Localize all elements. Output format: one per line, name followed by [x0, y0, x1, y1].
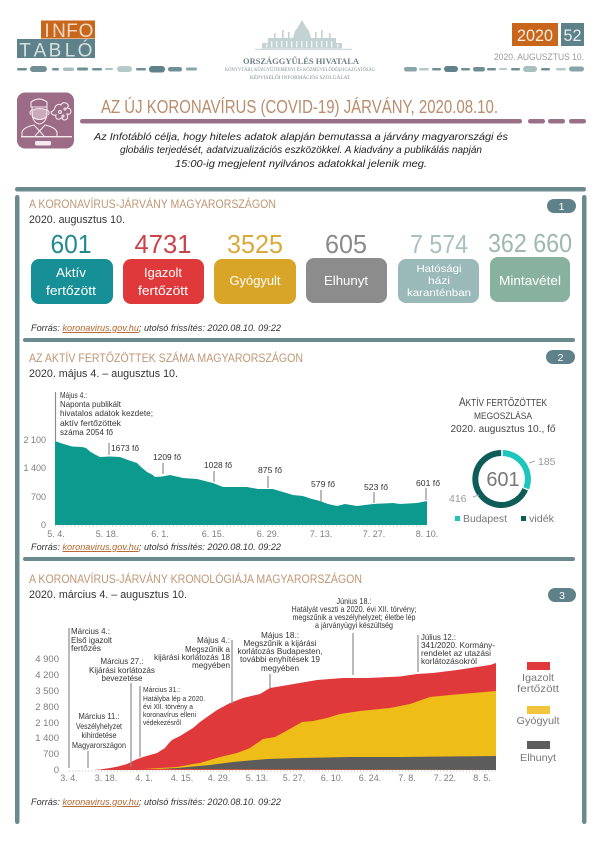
stat: recovered: Gyógyult: [230, 274, 281, 288]
area: recovered: [143, 691, 496, 770]
annotation: March 31: Hatályba lép a 2020.: [143, 694, 205, 703]
y axis labels: 0: [41, 520, 46, 530]
stat: confirmed: [123, 229, 204, 304]
intro text: globális terjedését, adatvizualizációs eszközökkel. A kiadvány a publikálás napján: [120, 144, 482, 156]
x axis labels: 6. 29.: [257, 529, 279, 539]
x axis labels: 6. 24.: [359, 773, 381, 783]
x axis labels: 5. 4.: [47, 529, 65, 539]
donut legend: [455, 513, 555, 525]
badge 3: 3: [559, 590, 565, 602]
panel frame: [15, 187, 586, 824]
annotation: June 18: megszűnik a veszélyhelyzet; életbe lép: [292, 612, 416, 622]
annotation: May 18: megyében: [261, 663, 299, 673]
annotation: July 12: korlátozásokról: [421, 656, 477, 666]
icon: doctor with mask and virus: [17, 92, 74, 148]
donut chart title: [450, 395, 556, 435]
donut chart title: 2020. augusztus 10., fő: [450, 423, 556, 435]
annotation: March 11: [72, 711, 126, 768]
title underline: [80, 119, 586, 124]
x axis labels: 5. 18.: [96, 529, 118, 539]
x axis labels: 5. 13.: [246, 773, 268, 783]
data labels: 1028 fő: [204, 460, 232, 470]
annotation: March 11: Veszélyhelyzet: [76, 721, 123, 731]
annotation: May 4 restrictions: megyében: [192, 660, 230, 670]
annotation: June 18: Hatályát veszti a 2020. évi XII. törvény;: [292, 604, 416, 614]
issue number and date: 2020. AUGUSZTUS 10.: [494, 52, 584, 63]
chart legend: [516, 662, 560, 764]
x axis labels: 8. 10.: [416, 529, 438, 539]
annotation: March 31: évi XII. törvény a: [143, 702, 194, 711]
chart legend: Igazolt: [522, 672, 554, 684]
section 1 date: 2020. augusztus 10.: [29, 214, 125, 226]
title: AZ ÚJ KORONAVÍRUS (COVID-19) JÁRVÁNY, 2020.08.10.: [101, 96, 498, 117]
annotation: May 18: további enyhítések 19: [240, 654, 320, 664]
panel: Hungary summary: [29, 198, 576, 334]
intro text: [93, 131, 509, 170]
x axis labels: 4. 1.: [135, 773, 153, 783]
area: deceased: [160, 756, 496, 770]
panel: chronology: [29, 573, 576, 808]
stat: active: fertőzött: [46, 284, 97, 298]
stat: confirmed: fertőzött: [138, 284, 189, 298]
issue number and date: [494, 23, 584, 63]
y axis labels: 4 900: [35, 654, 59, 665]
annotation: March 27: Március 27.:: [100, 656, 144, 666]
stat: samples: [488, 228, 572, 302]
logo: Országgyűlés Hivatala: ORSZÁGGYŰLÉS HIVATALA: [243, 56, 360, 66]
badge 2: [546, 350, 575, 364]
annotation: March 31: védekezésről: [143, 718, 181, 727]
annotation: March 11: kihirdetése: [82, 730, 117, 740]
donut chart title: MEGOSZLÁSA: [474, 411, 533, 422]
section 2 heading: AZ AKTÍV FERTŐZÖTTEK SZÁMA MAGYARORSZÁGON: [29, 351, 303, 365]
section 3 heading: A KORONAVÍRUS-JÁRVÁNY KRONOLÓGIÁJA MAGYARORSZÁGON: [29, 573, 362, 586]
chart legend: fertőzött: [517, 683, 559, 695]
annotation: May 4: száma 2054 fő: [60, 427, 113, 437]
issue number and date: 2020: [517, 26, 553, 45]
x axis labels: 8. 5.: [473, 773, 491, 783]
y axis labels: 1 400: [23, 463, 46, 473]
x axis labels: [60, 773, 491, 783]
annotation: May 4 restrictions: Megszűnik a: [185, 644, 230, 654]
annotation: March 11: Március 11.:: [78, 711, 120, 721]
source line 3: Forrás: koronavirus.gov.hu; utolsó frissítés: 2020.08.10. 09:22: [31, 797, 282, 808]
badge 1: [547, 199, 576, 213]
data labels: 875 fő: [258, 465, 282, 475]
annotation: May 4 restrictions: Május 4.:: [197, 635, 230, 645]
x axis labels: 3. 4.: [60, 773, 78, 783]
donut chart title: AKTÍV FERTŐZÖTTEK: [459, 395, 547, 409]
intro text: 15:00-ig megjelent nyilvános adatokkal jelenik meg.: [175, 158, 427, 170]
section 3 date: 2020. március 4. – augusztus 10.: [29, 589, 187, 601]
annotation: March 31: Március 31.:: [143, 685, 180, 694]
annotation: May 4 restrictions: kijárási korlátozás 18: [154, 652, 230, 662]
stat: samples: 362 660: [488, 228, 572, 258]
logo: Országgyűlés Hivatala: KÖNYVTÁRI, KÖZGYŰJTEMÉNYI ÉS KÖZMŰVELŐDÉSI IGAZGATÓSÁG: [225, 67, 375, 73]
annotation: July 12: rendelet az utazási: [421, 648, 491, 658]
x axis labels: 7. 27.: [363, 529, 385, 539]
badge 2: 2: [558, 352, 564, 364]
x axis labels: [47, 529, 438, 539]
y axis labels: 3 500: [35, 686, 59, 697]
annotation: May 4: hivatalos adatok kezdete;: [60, 408, 153, 418]
annotation: July 12: [418, 632, 495, 672]
y axis labels: 700: [31, 492, 46, 502]
stat: samples: Mintavétel: [499, 274, 561, 288]
decorative dashes left: [17, 66, 197, 72]
stat: quarantine: házi: [428, 275, 450, 287]
stat: recovered: [214, 229, 296, 304]
intro text: Az Infotábló célja, hogy hiteles adatok alapján bemutassa a járvány magyarországi és: [93, 131, 509, 143]
stat: active: 601: [50, 229, 92, 259]
stat: quarantine: karanténban: [407, 287, 471, 299]
y axis labels: 2 100: [23, 435, 46, 445]
section 2 date: 2020. május 4. – augusztus 10.: [29, 368, 178, 380]
annotation: May 4: Naponta publikált: [60, 399, 122, 409]
annotation: May 4: aktív fertőzöttek: [60, 418, 122, 428]
donut chart: 185: [538, 456, 556, 468]
data labels: 1673 fő: [111, 443, 139, 453]
annotation: March 27: [89, 656, 155, 767]
section 1 heading: A KORONAVÍRUS-JÁRVÁNY MAGYARORSZÁGON: [29, 198, 276, 211]
donut chart: 601: [486, 469, 520, 491]
source line 2: Forrás: koronavirus.gov.hu; utolsó frissítés: 2020.08.10. 09:22: [31, 542, 282, 553]
stat: active: [31, 229, 113, 304]
data labels: 523 fő: [364, 482, 388, 492]
data labels: 601 fő: [416, 478, 440, 488]
stat: confirmed: 4731: [134, 229, 192, 259]
logo: Országgyűlés Hivatala: KÉPVISELŐI INFORMÁCIÓS SZOLGÁLAT: [250, 75, 350, 81]
logo: Infotábló: INFO: [44, 21, 93, 42]
annotation: March 31: [140, 685, 205, 757]
annotation: June 18: a járványügyi készültség: [315, 620, 393, 630]
annotation: March 27: bevezetése: [102, 673, 143, 683]
y axis labels: 1 400: [35, 733, 59, 744]
logo: Infotábló: [17, 20, 95, 62]
stat: confirmed: Igazolt: [144, 266, 183, 280]
annotation: May 18: [238, 630, 322, 688]
x axis labels: 3. 18.: [95, 773, 117, 783]
annotation: June 18: [292, 596, 416, 675]
donut chart: [449, 453, 556, 505]
stacked area chart: [35, 596, 496, 783]
logo: Országgyűlés Hivatala: [225, 20, 375, 81]
annotation: May 4: [56, 390, 153, 441]
donut legend: Budapest: [463, 513, 507, 525]
annotation: May 4: Május 4.:: [60, 390, 87, 400]
donut legend: vidék: [529, 513, 555, 525]
annotation: May 18: korlátozás Budapesten,: [238, 646, 322, 656]
chart legend: Gyógyult: [516, 715, 560, 727]
issue number and date: 52: [564, 26, 582, 45]
source line 1: Forrás: koronavirus.gov.hu; utolsó frissítés: 2020.08.10. 09:22: [31, 323, 282, 334]
y axis labels: [35, 654, 59, 776]
y axis labels: 0: [54, 765, 59, 776]
stat: quarantine: [398, 229, 479, 303]
annotation: March 4: Március 4.:: [71, 626, 110, 636]
annotation: July 12: 341/2020. Kormány-: [421, 640, 495, 650]
x axis labels: 5. 27.: [283, 773, 305, 783]
y axis labels: 4 200: [35, 670, 59, 681]
annotation: May 18: Május 18.:: [261, 630, 299, 640]
annotation: March 27: Kijárási korlátozás: [89, 665, 155, 675]
stat: deceased: 605: [325, 229, 367, 259]
x axis labels: 6. 1.: [151, 529, 169, 539]
stat: recovered: 3525: [227, 229, 283, 259]
badge 1: 1: [559, 201, 565, 213]
x axis labels: 7. 8.: [398, 773, 416, 783]
annotation: March 4: [69, 626, 113, 768]
x axis labels: 7. 13.: [310, 529, 332, 539]
y axis labels: 2 100: [35, 718, 59, 729]
y axis labels: [23, 435, 46, 530]
annotation: June 18: Június 18.:: [336, 596, 372, 606]
logo: Infotábló: TABLÓ: [19, 40, 92, 62]
annotation: March 4: Első igazolt: [71, 635, 113, 645]
data labels: 1209 fő: [153, 452, 181, 462]
stat: deceased: Elhunyt: [324, 274, 369, 288]
x axis labels: 6. 15.: [202, 529, 224, 539]
stat: active: Aktív: [56, 266, 87, 280]
y axis labels: 2 800: [35, 702, 59, 713]
data labels: 579 fő: [311, 479, 335, 489]
donut chart: 416: [449, 493, 467, 505]
data labels: [109, 443, 440, 503]
badge 3: [548, 588, 576, 602]
x axis labels: 7. 22.: [434, 773, 456, 783]
chart legend: Elhunyt: [520, 752, 556, 764]
stat: quarantine: 7 574: [410, 229, 468, 259]
annotation: March 4: fertőzés: [71, 643, 101, 653]
y axis labels: 700: [43, 749, 59, 760]
area: confirmed: [93, 663, 496, 770]
annotation: March 11: Magyarországon: [72, 740, 126, 750]
stat: deceased: [306, 229, 387, 303]
stat: quarantine: Hatósági: [416, 263, 462, 275]
area chart: active cases: [23, 390, 440, 539]
x axis labels: 6. 10.: [321, 773, 343, 783]
panel: active cases: [23, 350, 575, 553]
x axis labels: 4. 29.: [208, 773, 230, 783]
annotation: May 4 restrictions: [154, 635, 232, 704]
annotation: March 31: koronavírus elleni: [143, 710, 196, 719]
annotation: May 18: Megszűnik a kijárási: [244, 638, 317, 648]
decorative dashes right: [404, 66, 584, 72]
annotation: July 12: Július 12.:: [421, 632, 456, 642]
x axis labels: 4. 15.: [171, 773, 193, 783]
